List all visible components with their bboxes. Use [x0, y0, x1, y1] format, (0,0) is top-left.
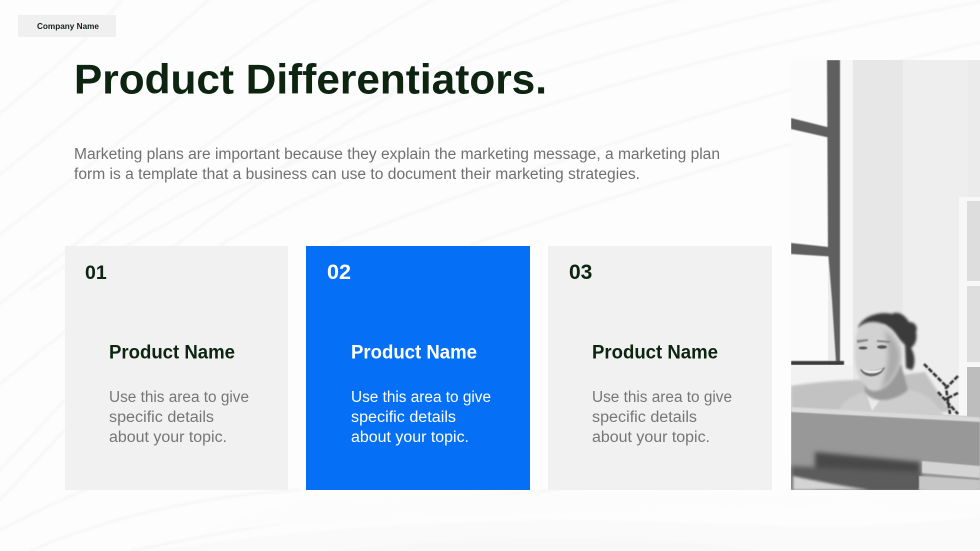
intro text: form is a template that a business can use to document their marketing strategies. [74, 166, 640, 183]
woman's face [855, 322, 902, 391]
panel: card 01 [65, 246, 288, 490]
panel: card 03 [548, 246, 772, 490]
card 01 heading: Product Name [109, 342, 235, 364]
company name tag [18, 15, 116, 37]
card 03 body: Use this area to give [592, 389, 732, 406]
card 03 number: 03 [569, 261, 592, 284]
card 03 heading: Product Name [592, 342, 718, 364]
card 01 body [109, 389, 249, 446]
woman's smile [860, 367, 885, 376]
card 02 body: Use this area to give [351, 389, 491, 406]
title: Product Differentiators. [74, 56, 547, 102]
plant [924, 364, 958, 414]
card 03 body: about your topic. [592, 429, 710, 446]
card 02 body: about your topic. [351, 429, 469, 446]
woman's neck [864, 364, 908, 400]
panel: card 02 [306, 246, 530, 490]
sofa back [791, 372, 950, 412]
card 01 body: specific details [109, 409, 214, 426]
company name tag: Company Name [37, 21, 99, 31]
woman's hair [858, 313, 917, 370]
card 01 body: Use this area to give [109, 389, 249, 406]
card 03 body: specific details [592, 409, 697, 426]
card 02 body: specific details [351, 409, 456, 426]
card 02 body [351, 389, 491, 446]
card 01 number: 01 [85, 262, 107, 284]
desk partition [791, 408, 980, 490]
intro text [74, 146, 720, 183]
woman's eyes and brows [857, 339, 890, 350]
card 02 number: 02 [327, 260, 351, 284]
woman's shirt [841, 390, 943, 415]
intro text: Marketing plans are important because they explain the marketing message, a marketing plan [74, 146, 720, 163]
bookshelf [959, 197, 980, 419]
card 02 heading: Product Name [351, 342, 477, 364]
card 01 body: about your topic. [109, 429, 227, 446]
card 03 body [592, 389, 732, 446]
photo: smiling woman in office, black and white [791, 60, 980, 490]
